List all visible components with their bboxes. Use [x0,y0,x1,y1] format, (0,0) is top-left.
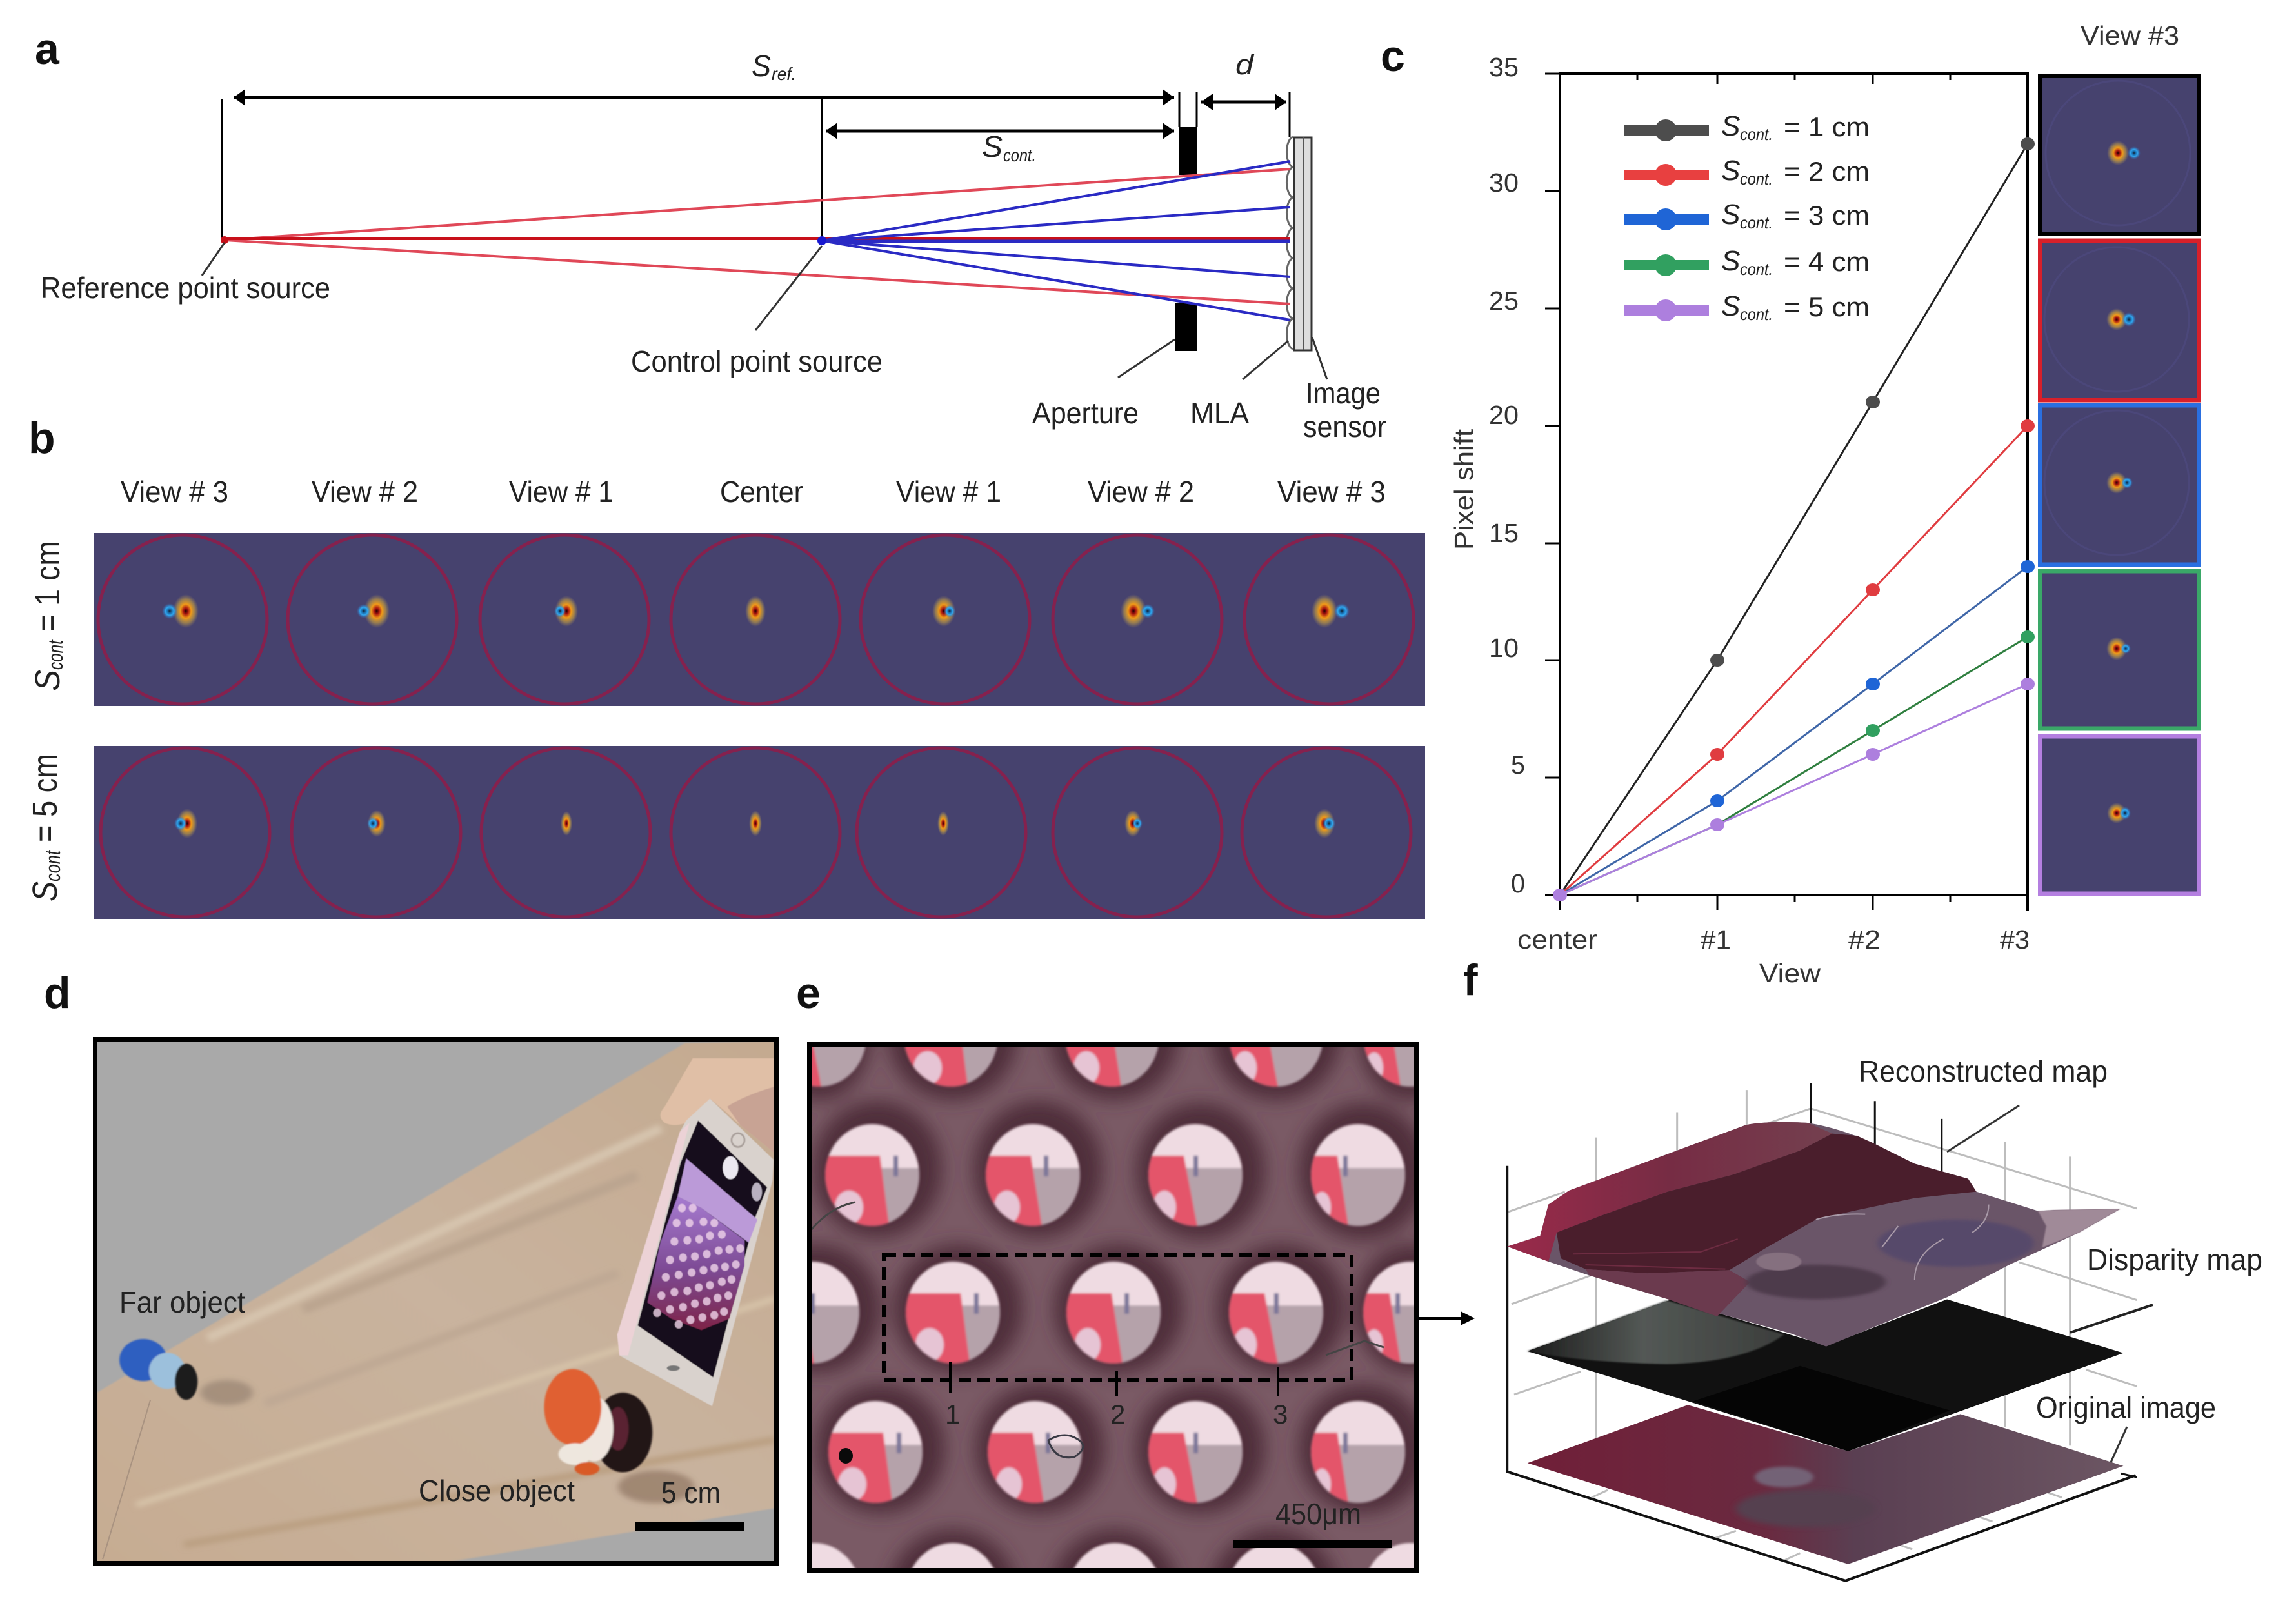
row label: S cont = 5 cm: S [26,881,65,901]
panel b: view labels: View # 1 [896,475,1001,508]
image strip: S cont = 5 cm [94,746,1425,919]
panel b: view labels [121,475,1386,508]
dashed selection box [884,1255,1352,1380]
phone screen [637,1120,767,1377]
text: reference point source: Reference point source [41,271,330,305]
inset: S cont = 3 cm [2040,405,2199,565]
panel label f: f [1463,956,1478,1005]
series: S cont = 1 cm [1560,137,2035,895]
label: d: d [1235,49,1255,81]
dark halos around lenses [752,971,1471,1601]
text: far object: Far object [119,1285,245,1319]
y axis tick labels: 10 [1489,633,1519,663]
panel b: view labels: View # 3 [121,475,228,508]
x axis tick labels: center [1517,925,1597,954]
scale bar [635,1522,744,1531]
text: image sensor [1303,376,1386,443]
series: S cont = 2 cm [1560,419,2035,895]
text: image sensor: Image [1306,376,1381,410]
original image plane [1528,1405,2123,1564]
chart legend: = 4 cm [1784,247,1870,277]
blue rays from control point [822,161,1290,320]
series: S cont = 4 cm [1560,630,2035,895]
text: aperture: Aperture [1032,396,1139,430]
y axis tick labels: 5 [1511,750,1525,780]
text: scale 5 cm: 5 cm [661,1476,721,1509]
chart legend: = 3 cm [1784,200,1870,230]
chart legend: S [1721,155,1740,186]
y axis tick labels: 35 [1489,52,1519,82]
x axis tick labels [1517,925,2030,954]
lens array on screen [654,1204,744,1329]
close object toy [544,1369,694,1503]
x axis title: View [1759,958,1821,988]
wood grain streaks [136,1128,775,1545]
disparity map plane [1528,1299,2123,1451]
far object toy [119,1339,253,1405]
frame [809,1044,1417,1571]
micro lens array [1286,137,1293,349]
image sensor [1294,137,1312,350]
chart legend: cont. [1740,213,1773,232]
chart legend: S [1721,245,1740,277]
panel e: microscope image of lens array [807,1042,1419,1573]
background [807,1042,1419,1573]
chart legend: = 5 cm [1784,292,1870,322]
chart legend: cont. [1740,259,1773,279]
panel label d: d [44,969,71,1018]
chart legend: S [1721,290,1740,322]
lens numbers: 3 [1273,1399,1288,1429]
panel b: view labels: View # 2 [1088,475,1194,508]
lens markers 1 2 3 [950,1362,1278,1396]
lens numbers [945,1399,1288,1429]
camera UI buttons [667,1133,762,1371]
chart axes [1545,74,2028,911]
grey plot frame lines [1507,1090,2137,1560]
row label: S cont = 1 cm: cont [44,639,67,670]
lenses [761,978,1462,1601]
row label: S cont = 5 cm: = 5 cm [26,754,65,842]
chart legend: S [1721,110,1740,142]
panel b: view labels: View # 3 [1277,475,1386,508]
lens numbers: 2 [1110,1399,1125,1429]
leader: original image [2111,1427,2127,1462]
chart legend: S [1721,199,1740,230]
scale bar [1233,1540,1392,1548]
phone body [617,1098,774,1406]
row label: S cont = 1 cm [28,541,67,691]
text: scale 450 um: 450μm [1275,1497,1361,1531]
inset: S cont = 5 cm [2040,736,2199,894]
image strip: S cont = 1 cm [94,533,1425,706]
grey background [93,1037,779,1566]
y axis tick labels: 30 [1489,168,1519,197]
hand [661,1058,774,1125]
panel b: view labels: View # 2 [312,475,418,508]
panel c: pixel shift line chart [1449,52,2035,988]
y axis tick labels: 15 [1489,518,1519,548]
x axis tick labels: #1 [1701,925,1731,954]
arrow from e to f [1419,1311,1475,1325]
frame [95,1039,777,1563]
chart legend: cont. [1740,305,1773,324]
inset: S cont = 2 cm [2040,241,2199,400]
panel label b: b [28,414,55,463]
label: S ref: S [752,49,771,83]
red rays from reference point [225,169,1290,304]
row label: S cont = 5 cm [26,754,65,901]
inset title: View #3: View #3 [2081,21,2179,50]
y axis title: Pixel shift [1449,428,1479,550]
inset: S cont = 1 cm [2040,76,2199,234]
panel b: view labels: View # 1 [509,475,614,508]
chart legend: = 2 cm [1784,156,1870,186]
x axis tick labels: #2 [1848,925,1881,954]
panel d: photograph of setup [93,1037,779,1566]
label: S cont: cont. [1003,145,1036,165]
row label: S cont = 1 cm: S [28,670,67,691]
leader: disparity map [2070,1305,2153,1333]
wooden table [97,1042,775,1563]
black plot axes [1507,1083,2137,1581]
inset: S cont = 4 cm [2040,571,2199,729]
text: disparity map: Disparity map [2087,1243,2262,1276]
row label: S cont = 1 cm: = 1 cm [28,541,67,632]
text: image sensor: sensor [1303,410,1386,443]
label: S cont: S [982,130,1003,163]
y axis tick labels [1489,52,1525,898]
reconstructed surface [1507,1122,2121,1347]
panel b: view labels: Center [720,475,803,508]
x axis tick labels: #3 [2000,925,2030,954]
series: S cont = 5 cm [1553,678,2035,901]
text: close object: Close object [419,1474,575,1507]
panel a: optical schematic [41,49,1386,443]
y axis tick labels: 25 [1489,286,1519,316]
label: S ref: ref. [772,64,796,84]
panel label e: e [796,969,821,1018]
panel label a: a [35,25,60,74]
chart legend: cont. [1740,169,1773,188]
text: original image: Original image [2036,1391,2216,1424]
chart legend [1624,110,1870,324]
text: control point source: Control point source [631,345,883,378]
leader: reconstructed map [1947,1105,2019,1152]
aperture [1175,127,1197,351]
specks and fibres [812,1202,1384,1464]
y axis tick labels: 20 [1489,400,1519,430]
leader lines [202,243,1327,379]
label: S ref [752,49,796,84]
text: MLA: MLA [1190,396,1249,430]
chart legend: = 1 cm [1784,112,1870,142]
y axis tick labels: 0 [1511,869,1525,898]
label: S cont [982,130,1036,165]
control point source dot [817,236,826,245]
chart legend: cont. [1740,125,1773,144]
series: S cont = 3 cm [1560,560,2035,895]
panel label c: c [1381,32,1405,81]
lower grey corner [446,1509,775,1563]
text: reconstructed map: Reconstructed map [1859,1054,2108,1088]
panel f: layered 3D reconstruction plot [1507,1054,2262,1581]
row label: S cont = 5 cm: cont [41,850,65,881]
reference point source dot [221,236,228,244]
lens numbers: 1 [945,1399,960,1429]
smartphone and hand [617,1058,777,1406]
dimension lines and arrows [222,92,1290,240]
